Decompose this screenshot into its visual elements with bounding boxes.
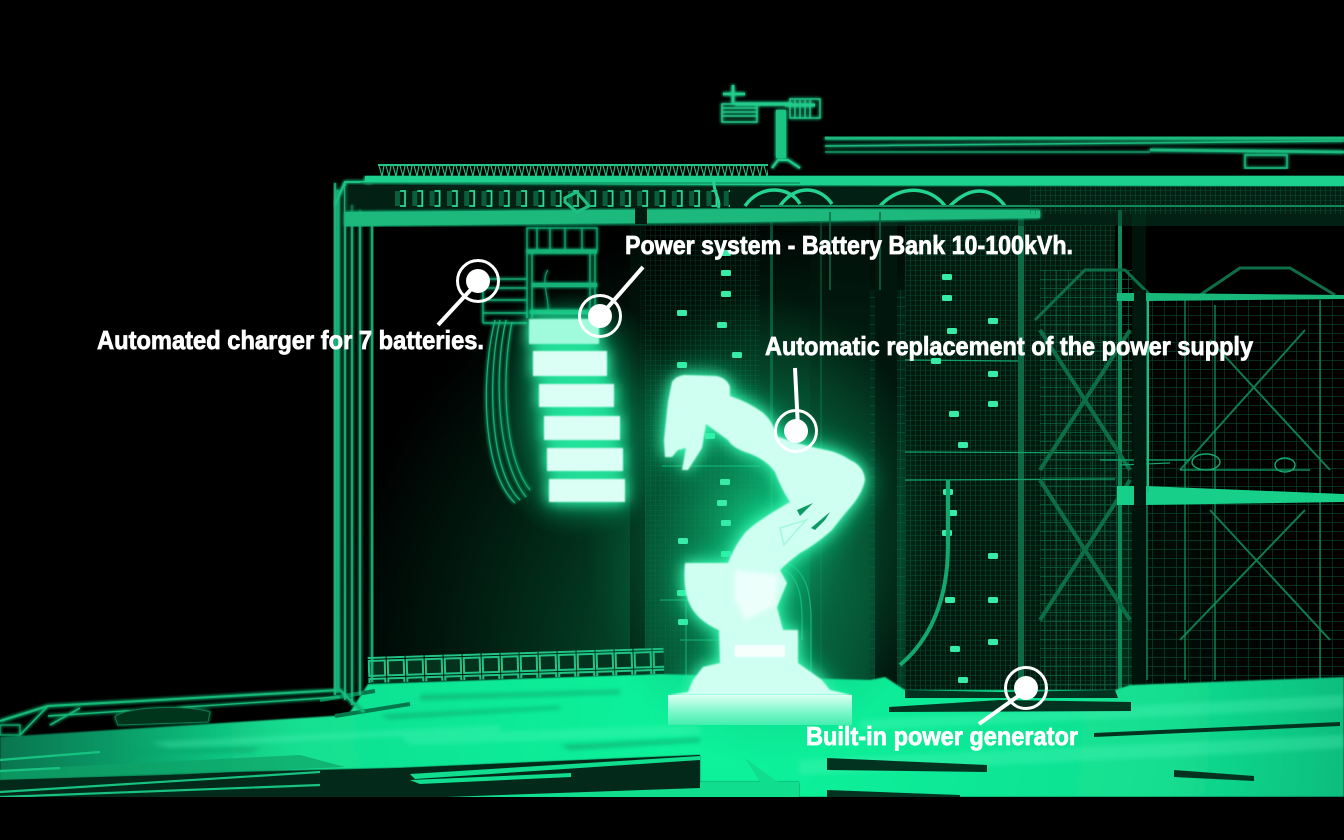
label: replacement text: Automatic replacement of the power supply [765, 331, 1253, 361]
callout: automatic replacement [765, 331, 1253, 452]
left frame post [335, 182, 372, 705]
robot arm cutouts [797, 503, 830, 530]
left floor railing [0, 690, 364, 735]
shoulder and base highlights [735, 570, 778, 620]
base highlight [735, 645, 785, 657]
battery cells [529, 319, 625, 502]
panel: right equipment racks [870, 200, 1344, 700]
bright shelf bar lower [1117, 486, 1344, 505]
panel: back wall racks behind robot [630, 210, 870, 690]
lower wall rail [368, 648, 664, 683]
robot body [664, 375, 865, 695]
panel: glowing battery stack [528, 318, 626, 503]
top frame beam [345, 164, 1344, 290]
floor dark gaps [827, 690, 1340, 797]
panel: robot arm [664, 375, 865, 725]
callout: automated charger [97, 260, 498, 355]
cable guide behind robot [785, 562, 811, 680]
panel: battery charger wireframe [483, 228, 598, 503]
bright shelf bar upper [1117, 293, 1344, 301]
floor [0, 674, 1344, 797]
icon: weather station [722, 85, 820, 168]
floor soft bands [150, 695, 1344, 775]
robot plinth [668, 695, 852, 725]
glow behind batteries and robot [478, 290, 935, 765]
label: power system text: Power system - Battery Bank 10-100kVh. [625, 230, 1073, 260]
callout: power system [580, 230, 1073, 336]
top pipe rail [825, 138, 1344, 168]
bright floor strips [410, 756, 700, 797]
callout: built-in generator [806, 668, 1078, 751]
label: charger text: Automated charger for 7 batteries. [97, 325, 484, 355]
bottom black band [0, 797, 1344, 840]
label: generator text: Built-in power generator [806, 721, 1078, 751]
cable [900, 480, 948, 665]
green status marks [677, 250, 998, 683]
